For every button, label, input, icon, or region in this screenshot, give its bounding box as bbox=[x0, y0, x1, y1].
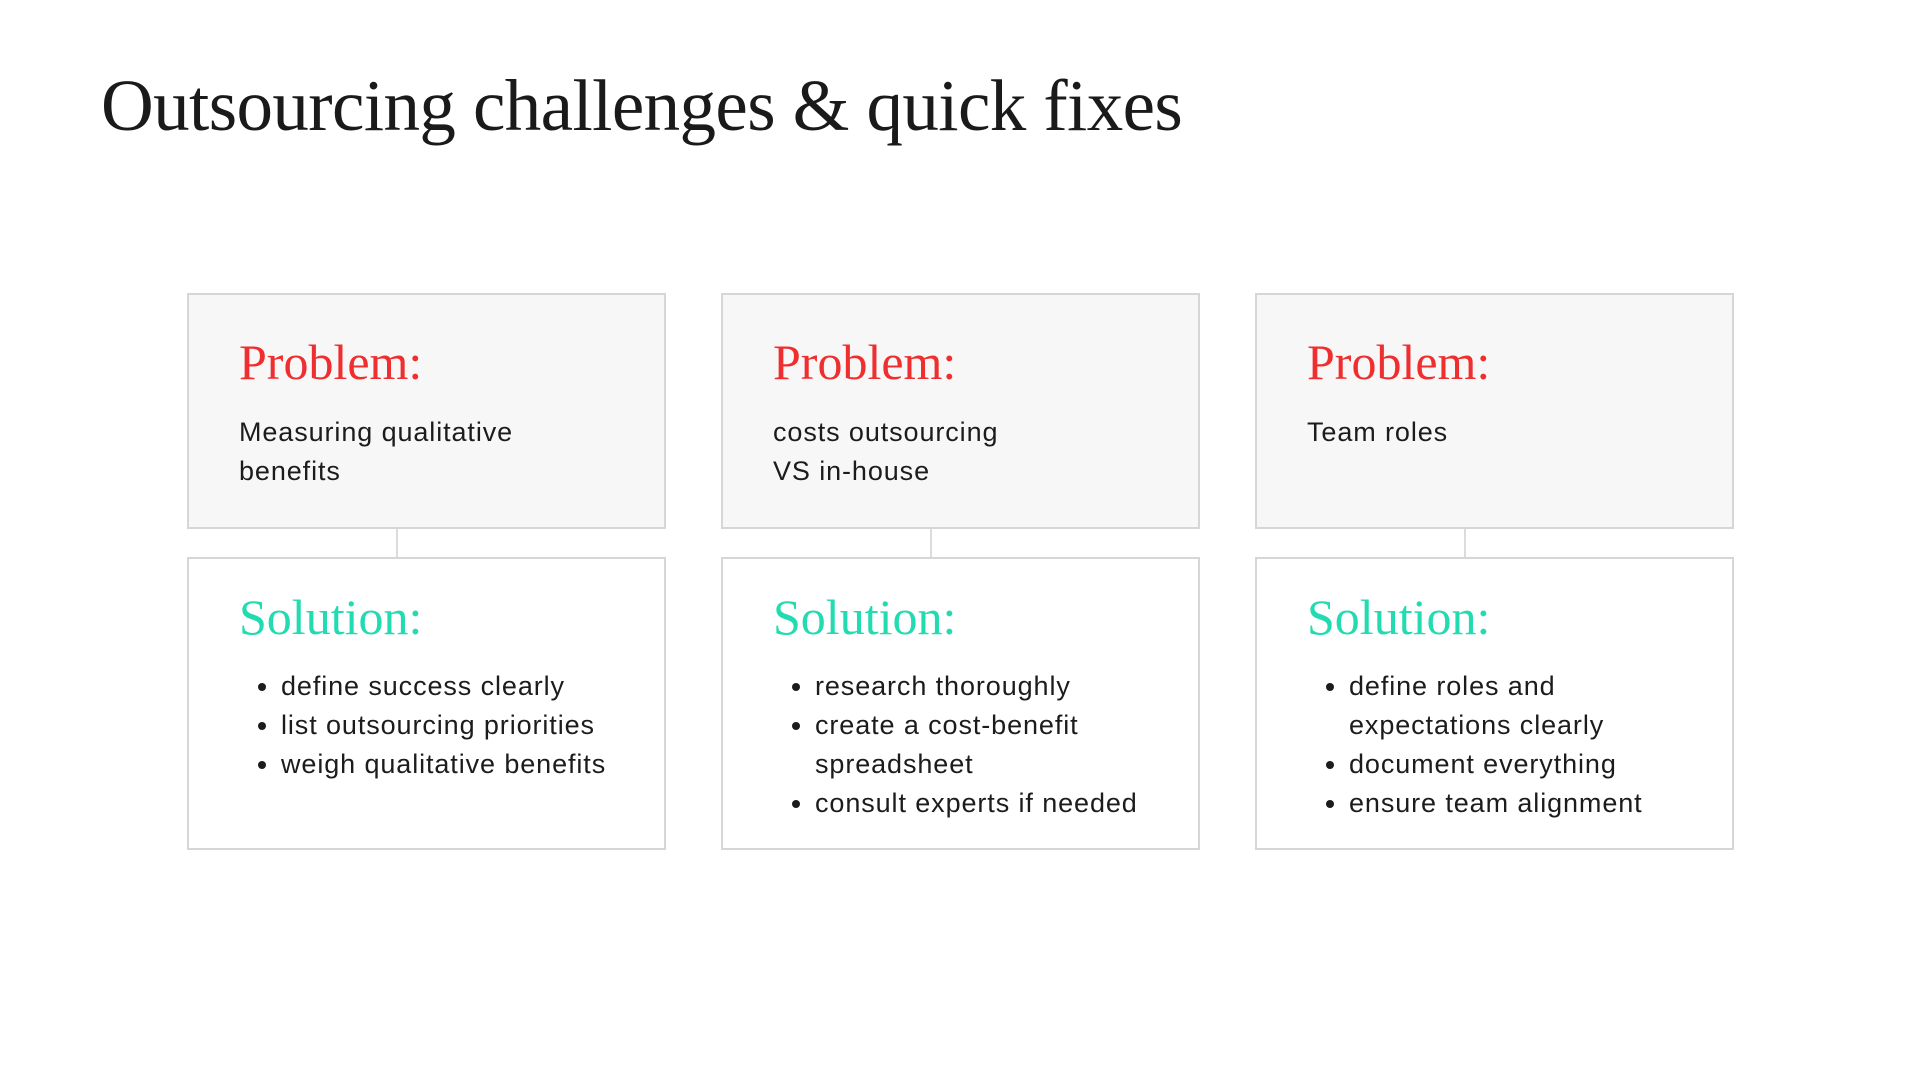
problem text 2: costs outsourcing bbox=[773, 417, 998, 447]
solution list 1: weigh qualitative benefits bbox=[281, 749, 606, 779]
connector 2 bbox=[930, 529, 932, 557]
solution list 1: define success clearly bbox=[281, 671, 565, 701]
solution list 3: ensure team alignment bbox=[1349, 788, 1643, 818]
solution list 2 bbox=[792, 671, 1138, 818]
panel: problem 2: Problem: bbox=[773, 334, 956, 390]
panel: solution 1 bbox=[187, 557, 666, 850]
panel: solution 1: Solution: bbox=[239, 589, 422, 645]
problem text 1: benefits bbox=[239, 456, 341, 486]
panel: problem 3 bbox=[1255, 293, 1734, 529]
solution list 1 bbox=[258, 671, 606, 779]
solution list 3: document everything bbox=[1349, 749, 1617, 779]
solution list 2: consult experts if needed bbox=[815, 788, 1138, 818]
problem text 3: Team roles bbox=[1307, 417, 1448, 447]
problem text 2 bbox=[773, 417, 998, 486]
panel: solution 2: Solution: bbox=[773, 589, 956, 645]
panel: problem 1: Problem: bbox=[239, 334, 422, 390]
problem text 2: VS in-house bbox=[773, 456, 930, 486]
solution list 3 bbox=[1326, 671, 1643, 818]
panel: solution 2 bbox=[721, 557, 1200, 850]
title: Outsourcing challenges & quick fixes bbox=[101, 65, 1182, 146]
panel: solution 3 bbox=[1255, 557, 1734, 850]
solution list 1: list outsourcing priorities bbox=[281, 710, 595, 740]
solution list 3: define roles and expectations clearly bbox=[1349, 671, 1604, 740]
problem text 1 bbox=[239, 417, 513, 486]
connector 1 bbox=[396, 529, 398, 557]
panel: problem 1 bbox=[187, 293, 666, 529]
solution list 2: create a cost-benefit spreadsheet bbox=[815, 710, 1079, 779]
panel: problem 3: Problem: bbox=[1307, 334, 1490, 390]
solution list 2: research thoroughly bbox=[815, 671, 1071, 701]
problem text 1: Measuring qualitative bbox=[239, 417, 513, 447]
panel: problem 2 bbox=[721, 293, 1200, 529]
panel: solution 3: Solution: bbox=[1307, 589, 1490, 645]
connector 3 bbox=[1464, 529, 1466, 557]
